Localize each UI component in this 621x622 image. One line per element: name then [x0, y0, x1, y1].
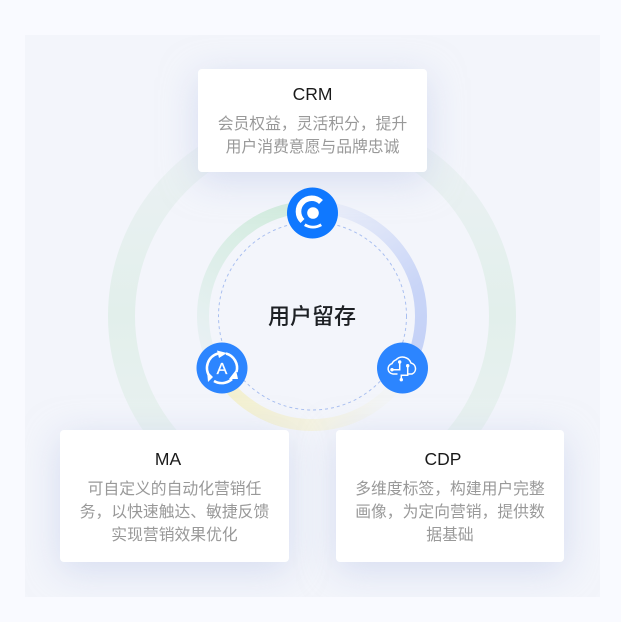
- dashed circle: [218, 222, 406, 410]
- heading: CDP: CDP: [425, 449, 461, 469]
- inner ring: [203, 207, 421, 425]
- panel: CDP: [336, 430, 564, 562]
- text: CRM description: 会员权益，灵活积分，提升: [218, 116, 407, 133]
- icon: CRM: [287, 188, 338, 238]
- heading: CRM: CRM: [293, 84, 332, 104]
- panel: CRM: [198, 69, 427, 172]
- text: CDP description: [356, 480, 544, 542]
- panel: MA: [60, 430, 289, 562]
- text: CRM description: [218, 115, 406, 154]
- text: MA description: [80, 480, 269, 542]
- text: MA description: 可自定义的自动化营销任: [88, 481, 261, 498]
- text: MA description: 务，以快速触达、敏捷反馈: [80, 504, 269, 521]
- icon: CDP: [377, 342, 428, 394]
- outer ring: [122, 126, 502, 506]
- icon: MA: [196, 342, 248, 394]
- text: MA description: 实现营销效果优化: [111, 527, 238, 544]
- text: CDP description: 多维度标签，构建用户完整: [355, 481, 545, 498]
- card group: [48, 65, 576, 582]
- text: CRM description: 用户消费意愿与品牌忠诚: [226, 139, 399, 156]
- heading: MA: MA: [155, 449, 181, 469]
- text: CDP description: 画像，为定向营销，提供数: [355, 504, 545, 521]
- text: CDP description: 据基础: [426, 527, 474, 544]
- center title: 用户留存: [268, 304, 356, 329]
- icon: MA: A: [217, 361, 228, 378]
